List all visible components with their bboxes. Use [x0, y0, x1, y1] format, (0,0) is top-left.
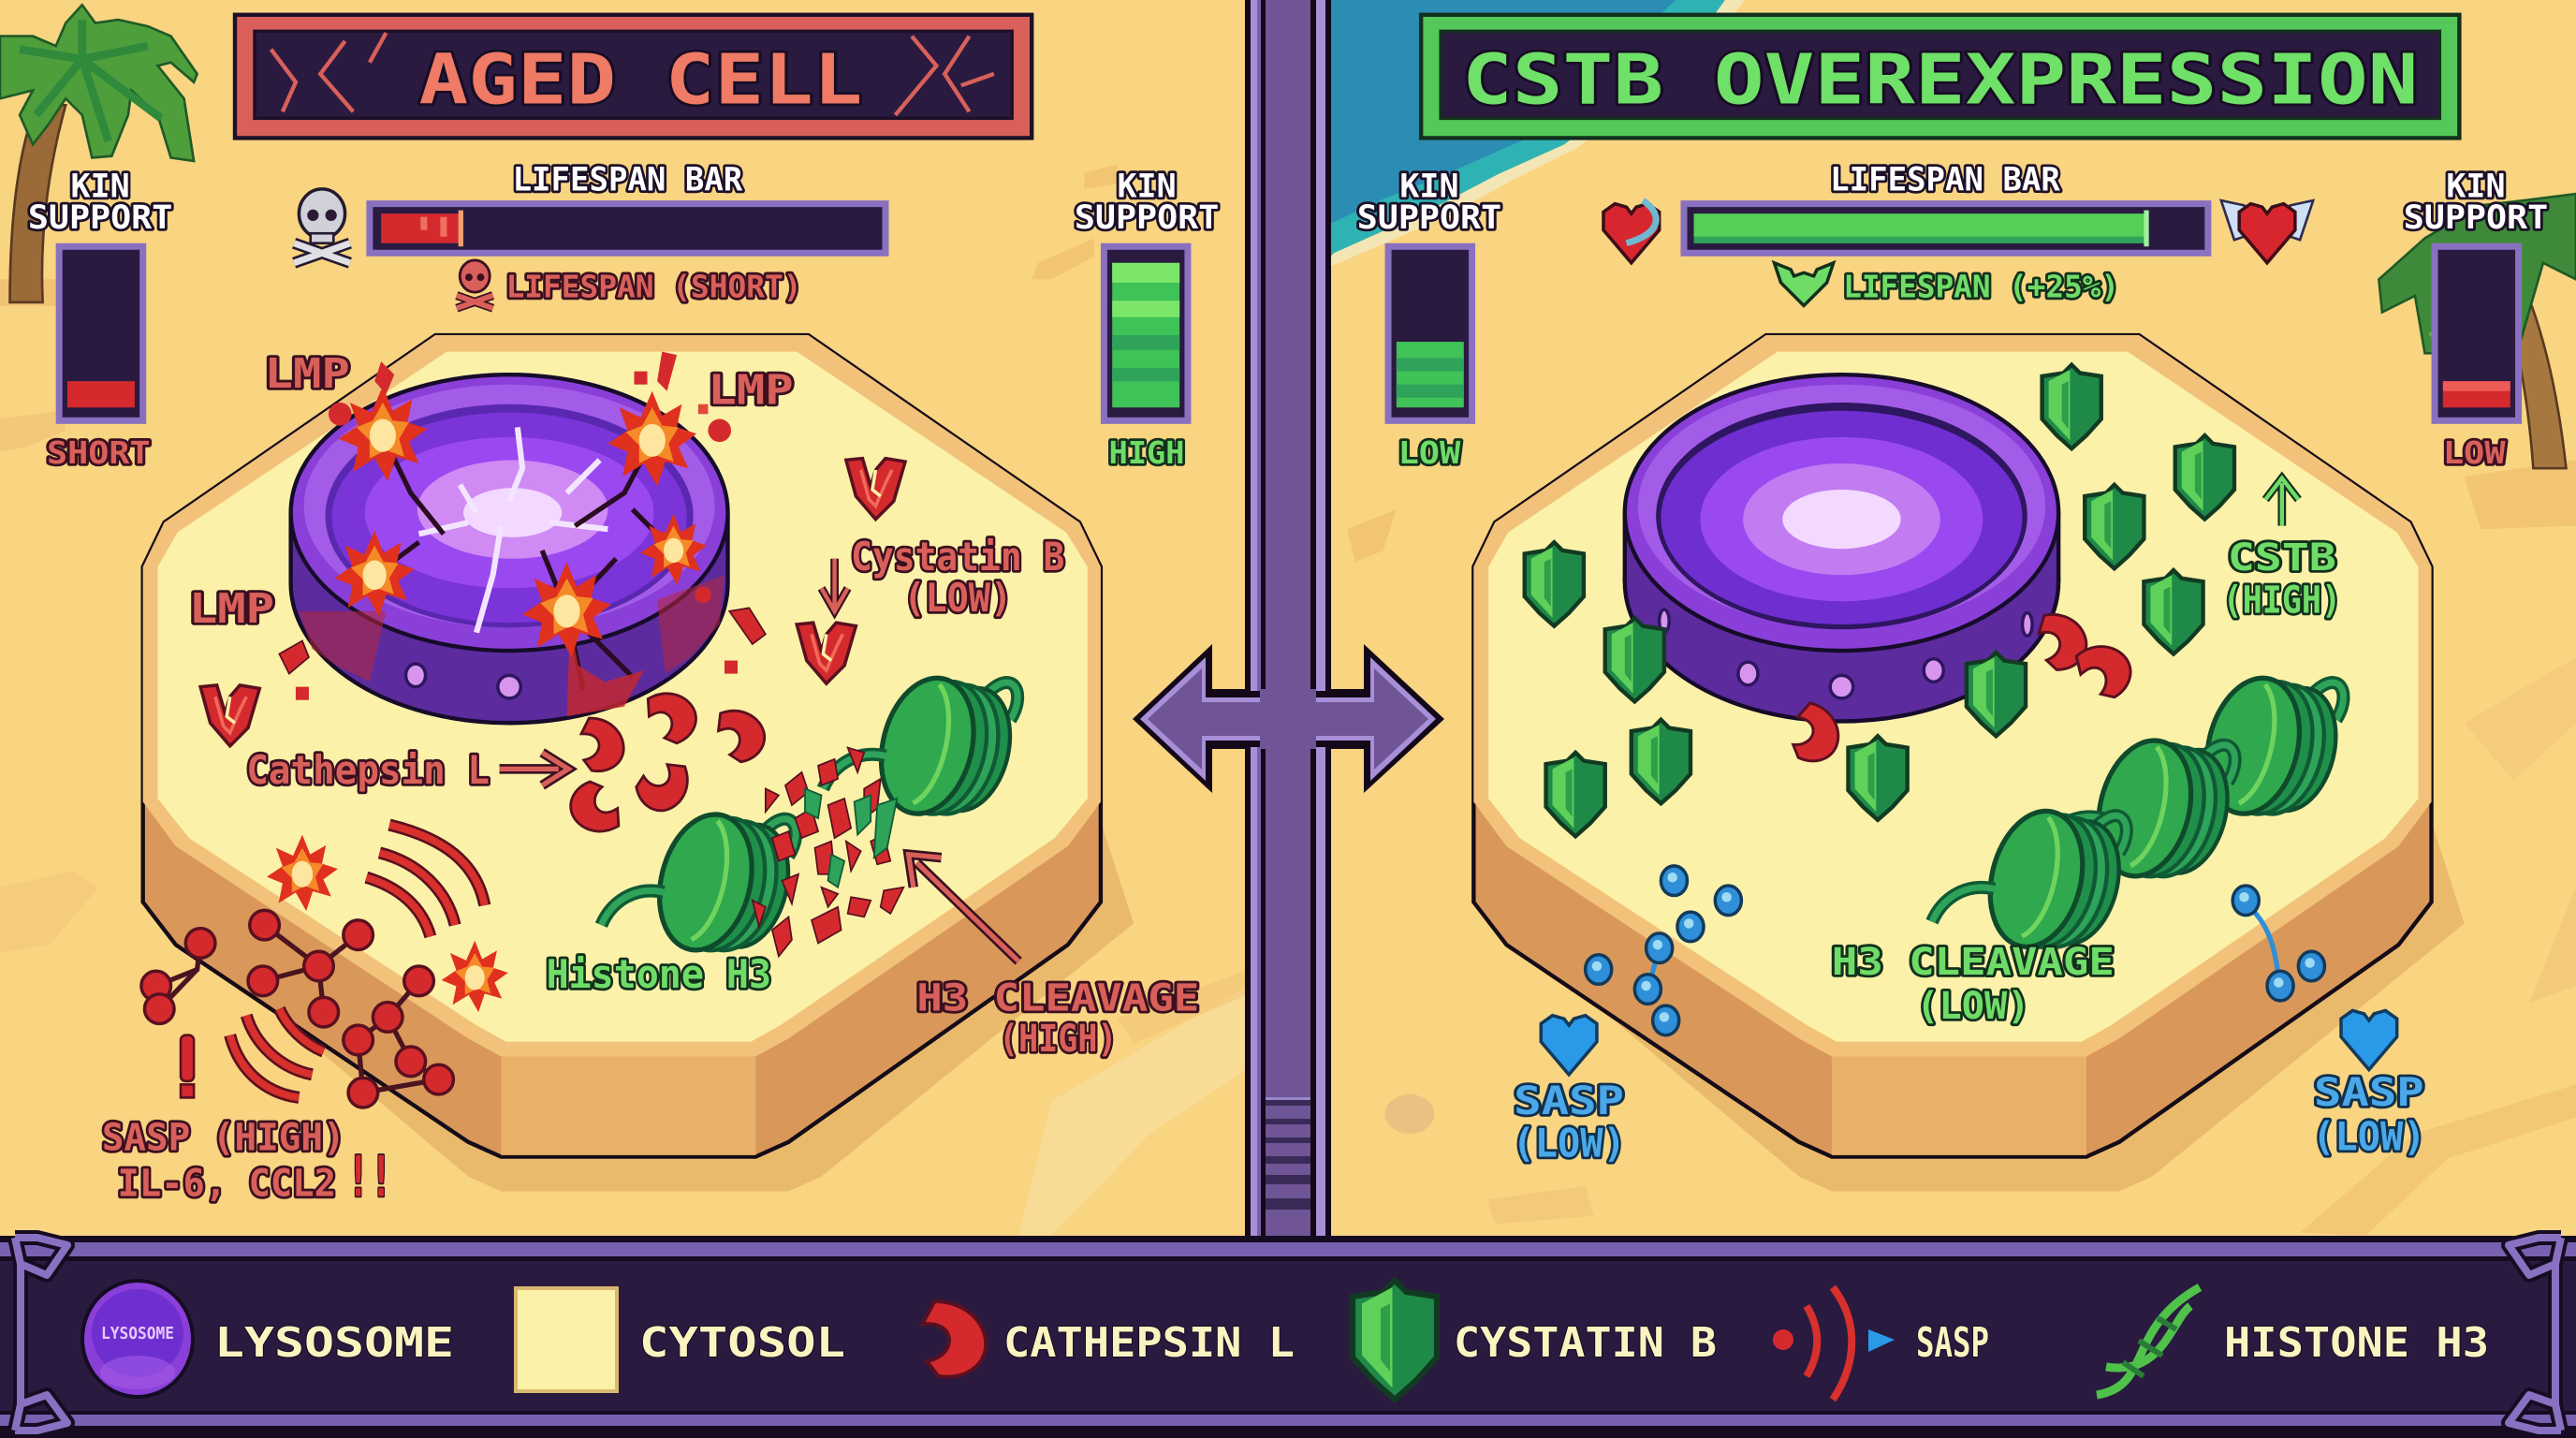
SASP molecules low: right [2232, 886, 2397, 1070]
kin support bar: right low green [1357, 168, 1501, 471]
sand patches [0, 165, 2576, 1236]
label: SASP low right [2312, 1069, 2425, 1160]
legend item: SASP [1773, 1287, 1989, 1400]
legend item: SASP: SASP [1916, 1319, 1989, 1367]
label: H3 cleavage low: H3 CLEAVAGE [1832, 940, 2115, 984]
label: H3 cleavage high with arrow [909, 855, 1199, 1061]
label: CSTB high with arrow: CSTB [2228, 536, 2336, 580]
kin support bar: left high: HIGH [1109, 434, 1184, 471]
lifespan bar: short: LIFESPAN BAR [513, 161, 743, 199]
leaked fragments around lysosome [279, 352, 766, 700]
label: SASP low right: (LOW) [2312, 1114, 2425, 1160]
histone H3 nucleosomes: intact [1932, 668, 2348, 965]
label: SASP low right: SASP [2314, 1069, 2424, 1115]
label: LMP 2: LMP [708, 367, 794, 415]
palm tree right [2378, 194, 2576, 468]
legend panel [0, 1236, 2576, 1438]
label: cystatin B low [822, 534, 1064, 621]
kin support bar: left short: SHORT [47, 434, 151, 471]
histone H3 nucleosomes: cleaved [601, 668, 1022, 969]
kin support bar: right low green: KIN [1399, 168, 1459, 206]
legend item: histone H3: HISTONE H3 [2224, 1319, 2489, 1367]
legend item: cytosol [516, 1288, 845, 1391]
label: SASP high: SASP (HIGH) [102, 1116, 345, 1160]
kin support bar: right low red: LOW [2443, 434, 2507, 471]
label: CSTB high with arrow [2223, 478, 2341, 623]
label: cathepsin L with arrow: Cathepsin L [246, 747, 490, 793]
panel: aged cell platform [143, 335, 1134, 1191]
label: H3 cleavage high with arrow: H3 CLEAVAGE [916, 976, 1199, 1020]
cystatin B shields [1525, 365, 2234, 836]
kin support bar: left short: KIN [70, 168, 130, 206]
label: cystatin B low: (LOW) [903, 575, 1012, 621]
cathepsin L fragments [200, 459, 905, 844]
label: SASP low left: (LOW) [1513, 1121, 1626, 1167]
SASP molecules low: left [1541, 866, 1741, 1075]
kin support bar: left high [1075, 168, 1219, 471]
kin support bar: left high: SUPPORT [1075, 198, 1219, 237]
label: H3 cleavage high with arrow: (HIGH) [999, 1017, 1117, 1061]
lifespan label: +25%: LIFESPAN (+25%) [1843, 269, 2119, 305]
kin support bar: right low red: SUPPORT [2404, 198, 2548, 237]
kin support bar: left short [28, 168, 172, 471]
kin support bar: right low red [2404, 168, 2548, 471]
title: aged cell: AGED CELL [419, 41, 862, 121]
kin support bar: right low red: KIN [2446, 168, 2506, 206]
panel: overexpression cell platform [1473, 335, 2465, 1191]
legend item: lysosome: LYSOSOME [214, 1319, 454, 1367]
kin support bar: right low green: LOW [1398, 434, 1461, 471]
lifespan label: +25% [1775, 263, 2119, 305]
palm tree left [0, 5, 198, 302]
label: histone H3: Histone H3 [547, 951, 771, 997]
beach water top right [1331, 0, 1745, 266]
kin support bar: left high: KIN [1117, 168, 1177, 206]
lifespan bar: extended: LIFESPAN BAR [1830, 161, 2061, 199]
label: SASP high [102, 1116, 392, 1211]
label: SASP high: IL-6, CCL2 [117, 1162, 336, 1206]
kin support bar: left short: SUPPORT [28, 198, 172, 237]
SASP cluster high [141, 825, 508, 1108]
legend item: cystatin B [1353, 1281, 1717, 1400]
label: SASP low left [1513, 1078, 1626, 1167]
legend item: cystatin B: CYSTATIN B [1454, 1319, 1717, 1367]
title: aged cell [235, 15, 1032, 138]
legend item: cathepsin L: CATHEPSIN L [1003, 1319, 1295, 1367]
label: H3 cleavage low: (LOW) [1916, 984, 2029, 1028]
legend item: cathepsin L [923, 1301, 1295, 1377]
title: cstb overexpression: CSTB OVEREXPRESSION [1462, 41, 2419, 121]
lifespan label: short [457, 260, 801, 308]
label: H3 cleavage low [1832, 940, 2115, 1028]
lifespan bar: extended [1603, 161, 2313, 263]
label: cystatin B low: Cystatin B [851, 534, 1064, 580]
title: cstb overexpression [1421, 15, 2459, 138]
label: SASP high: !! [346, 1146, 392, 1211]
lysosome: damaged [291, 374, 728, 723]
label: LMP 3: LMP [189, 585, 274, 633]
divider with double-headed arrow [1133, 0, 1444, 1238]
legend item: histone H3 [2097, 1287, 2489, 1395]
label: CSTB high with arrow: (HIGH) [2223, 579, 2341, 623]
label: LMP 1: LMP [265, 350, 350, 398]
legend item: lysosome: LYSOSOME [101, 1324, 174, 1343]
legend item: lysosome [82, 1281, 454, 1397]
lysosome: healthy [1625, 374, 2058, 721]
legend corner ornaments [15, 1238, 2561, 1431]
kin support bar: right low green: SUPPORT [1357, 198, 1501, 237]
lifespan bar: short [294, 161, 886, 263]
legend item: cytosol: CYTOSOL [639, 1319, 845, 1367]
cathepsin L inhibited [1788, 609, 2141, 767]
lifespan label: short: LIFESPAN (SHORT) [506, 269, 801, 305]
label: SASP low left: SASP [1514, 1078, 1624, 1123]
